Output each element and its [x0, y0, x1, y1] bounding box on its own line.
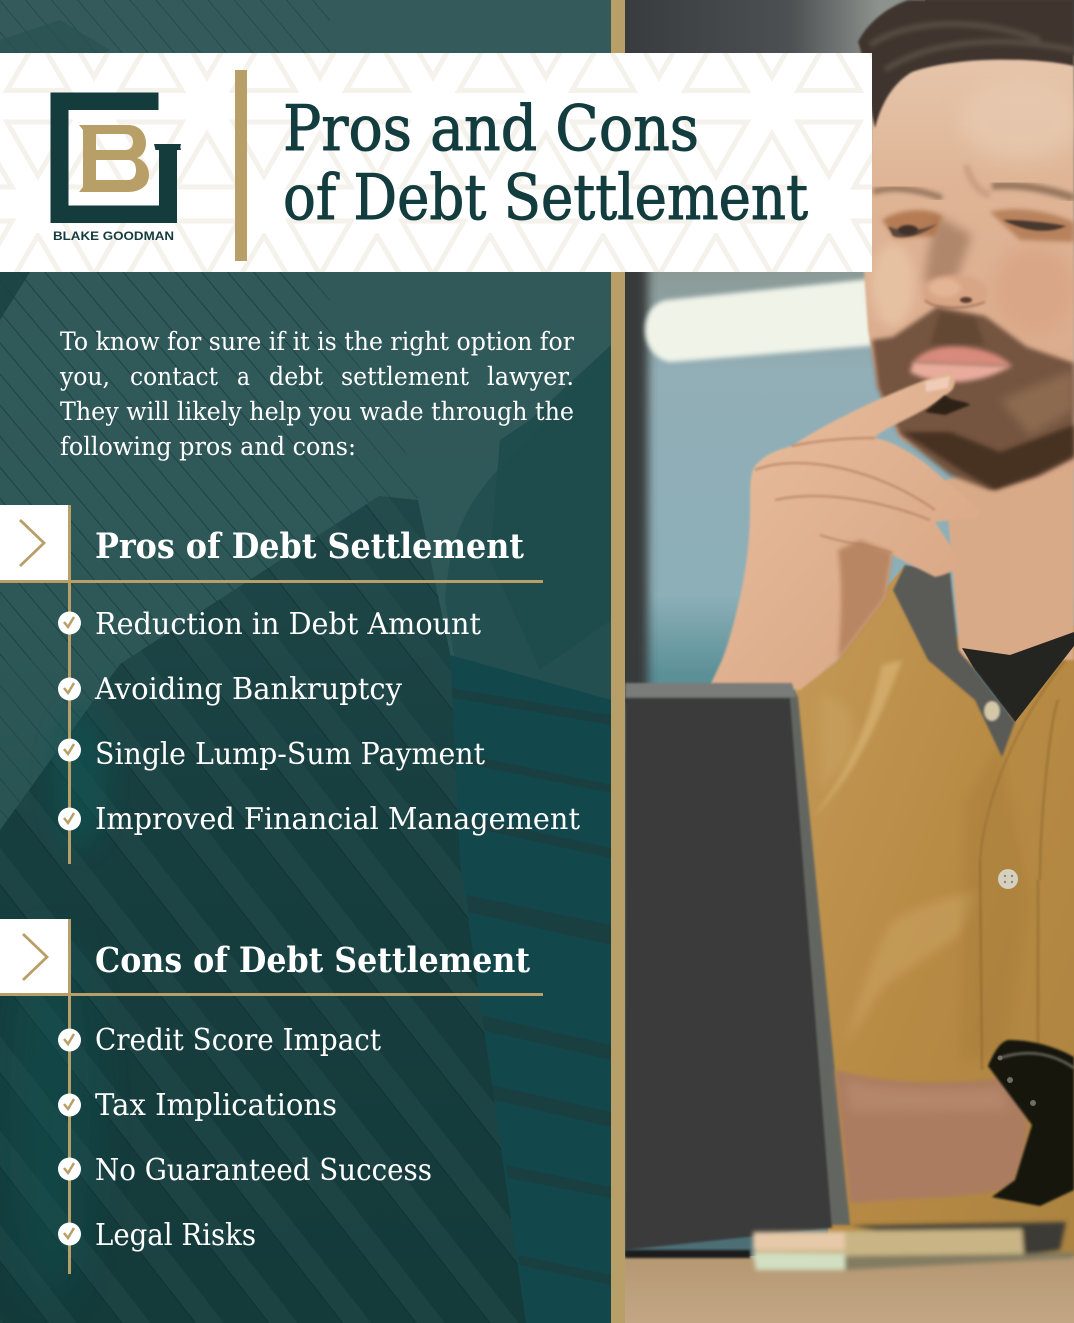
title: of Debt Settlement — [283, 161, 808, 234]
laptop — [625, 683, 850, 1250]
blurred ceiling light — [645, 278, 880, 362]
pros heading: Pros of Debt Settlement — [95, 526, 524, 567]
pros list: Avoiding Bankruptcy — [94, 672, 402, 707]
intro text block: contact — [130, 362, 219, 392]
neck and undershirt — [945, 450, 1074, 660]
cons list: Legal Risks — [95, 1218, 256, 1253]
logo: Blake Goodman — [50, 92, 181, 243]
grey collar — [893, 565, 1015, 757]
cons list: Tax Implications — [95, 1088, 337, 1123]
intro text block: following pros and cons: — [60, 432, 356, 462]
eyebrows — [873, 189, 942, 198]
eye sockets and eyes — [882, 210, 942, 238]
pros gold rules — [0, 505, 543, 864]
cons arrow tab — [0, 919, 68, 993]
panel: teal skyscraper background — [0, 0, 611, 1323]
title — [283, 92, 808, 234]
beard and moustache — [872, 307, 1074, 490]
intro text block: They will likely help you wade through the — [60, 397, 574, 427]
pros list — [94, 607, 580, 837]
divider: vertical gold stripe — [611, 0, 625, 1323]
shirt buttons — [984, 701, 1018, 889]
panel: white title header — [0, 53, 872, 272]
title: Pros and Cons — [283, 92, 699, 165]
cons gold rules — [0, 919, 543, 1274]
intro text block: debt — [269, 362, 324, 392]
cons list: No Guaranteed Success — [95, 1153, 432, 1188]
panel: photo of pensive man at a laptop — [612, 0, 1074, 1323]
photo backdrop — [625, 0, 1074, 1323]
desk — [625, 1256, 1074, 1323]
forearm — [835, 1070, 1027, 1203]
lips — [913, 346, 1012, 366]
intro text block: To know for sure if it is the right option for — [60, 327, 575, 357]
pros list: Reduction in Debt Amount — [95, 607, 481, 642]
header gold divider — [235, 70, 247, 261]
intro text block — [59, 327, 575, 462]
logo: Blake Goodman: BLAKE GOODMAN — [53, 231, 174, 243]
hair — [858, 0, 1074, 128]
pros list: Single Lump-Sum Payment — [95, 737, 485, 772]
cons check icons — [58, 1028, 81, 1246]
panel: cons of debt settlement — [0, 919, 543, 1274]
cons list — [95, 1023, 432, 1253]
intro text block: settlement — [341, 362, 470, 392]
cons list: Credit Score Impact — [95, 1023, 381, 1058]
intro text block: you, — [59, 362, 110, 392]
pros arrow tab — [0, 505, 68, 580]
pros list: Improved Financial Management — [95, 802, 580, 837]
panel: pros of debt settlement — [0, 505, 580, 864]
notebook and stack of paper — [753, 1222, 1074, 1270]
face — [864, 50, 1074, 490]
intro text block: a — [237, 362, 250, 392]
pros check icons — [58, 612, 81, 830]
shirt — [795, 565, 1074, 1262]
intro text block: lawyer. — [487, 362, 574, 392]
wristwatch — [988, 1040, 1074, 1206]
hand with fingers on chin — [708, 373, 980, 690]
cons heading: Cons of Debt Settlement — [95, 940, 530, 981]
